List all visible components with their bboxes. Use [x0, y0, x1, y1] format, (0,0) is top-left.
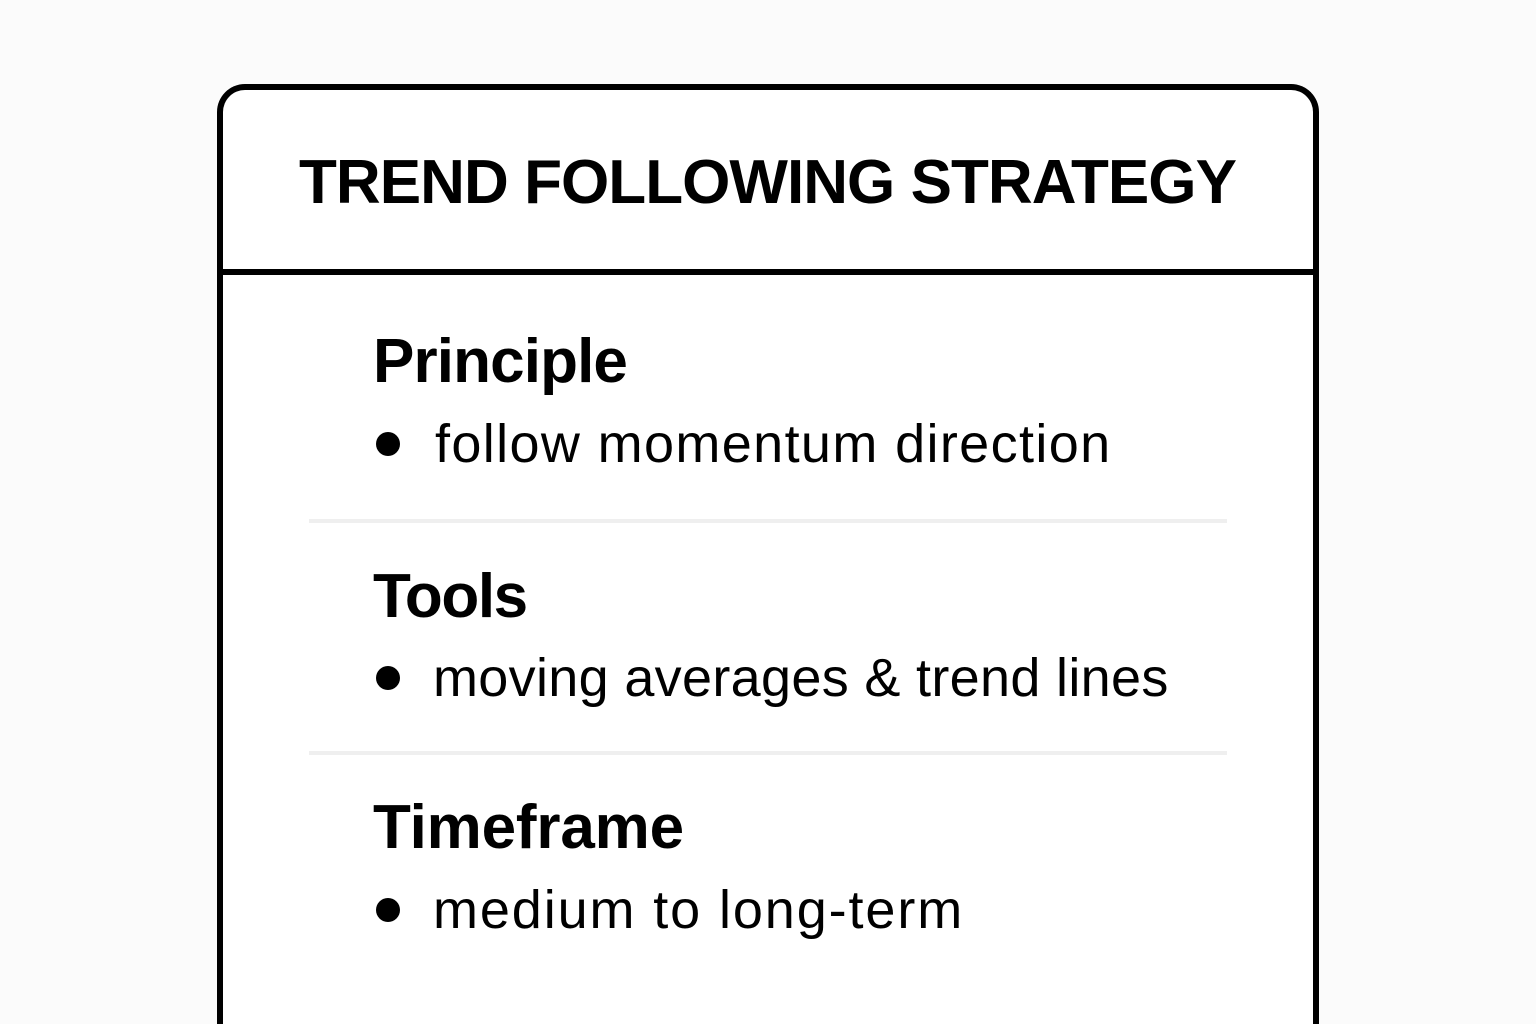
bullet: tools: [376, 666, 400, 690]
text: tools detail: moving averages & trend lines: [433, 648, 1169, 708]
heading: timeframe: Timeframe: [373, 793, 684, 862]
panel: strategy card: [217, 84, 1319, 1024]
bullet: principle: [376, 432, 400, 456]
section: timeframe: [373, 793, 964, 940]
bullet: timeframe: [376, 898, 400, 922]
heading: principle: Principle: [373, 327, 627, 396]
title: TREND FOLLOWING STRATEGY: [299, 148, 1236, 217]
text: timeframe detail: medium to long-term: [433, 880, 964, 940]
text: principle detail: follow momentum direction: [435, 414, 1112, 474]
section: principle: [373, 327, 1112, 474]
heading: tools: Tools: [373, 562, 527, 631]
section: tools: [373, 562, 1169, 708]
